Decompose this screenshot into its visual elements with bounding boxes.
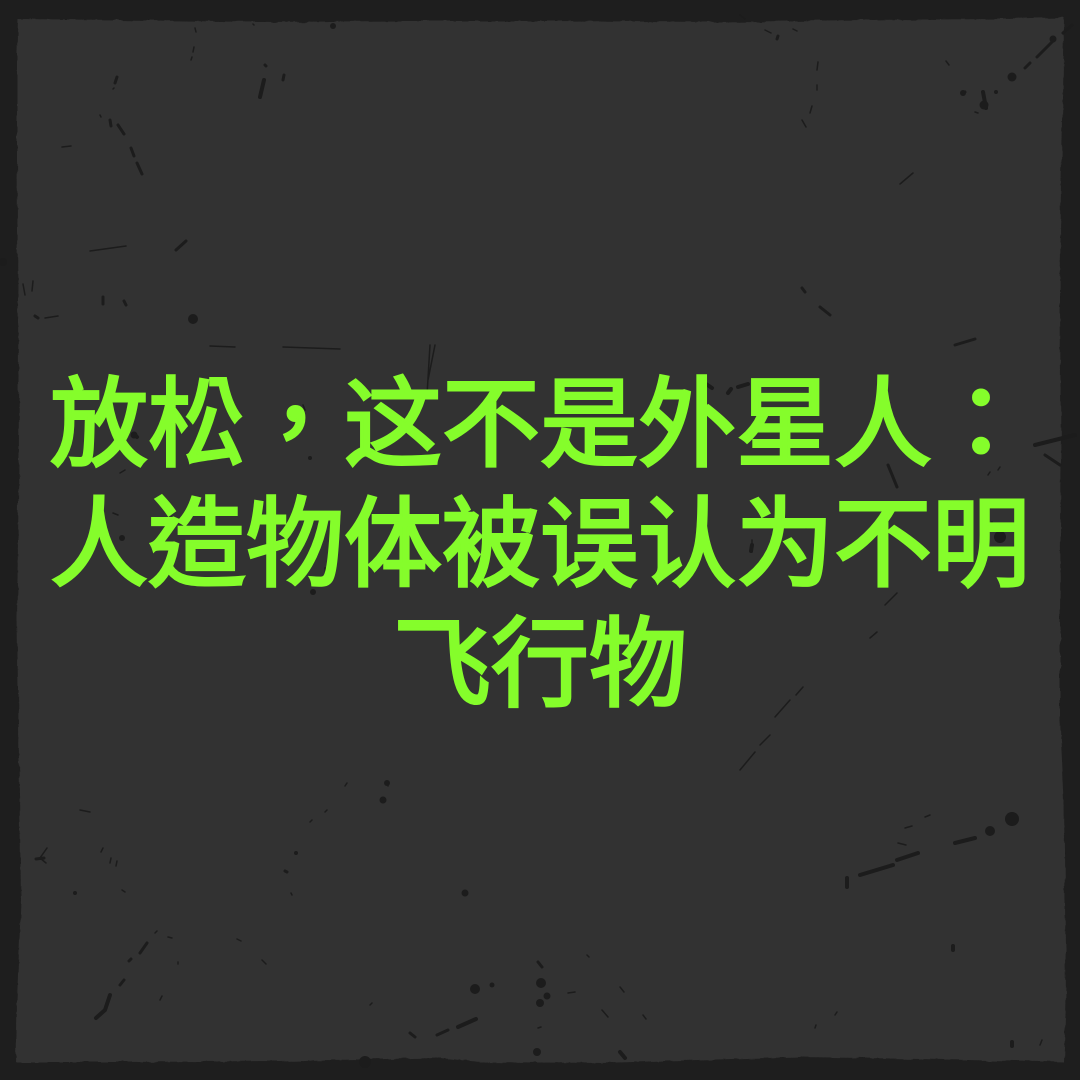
title: 人造物体被误认为不明 [50,465,1030,607]
title: 飞行物 [393,585,687,727]
title [50,345,1030,727]
title: 放松，这不是外星人： [50,345,1030,487]
